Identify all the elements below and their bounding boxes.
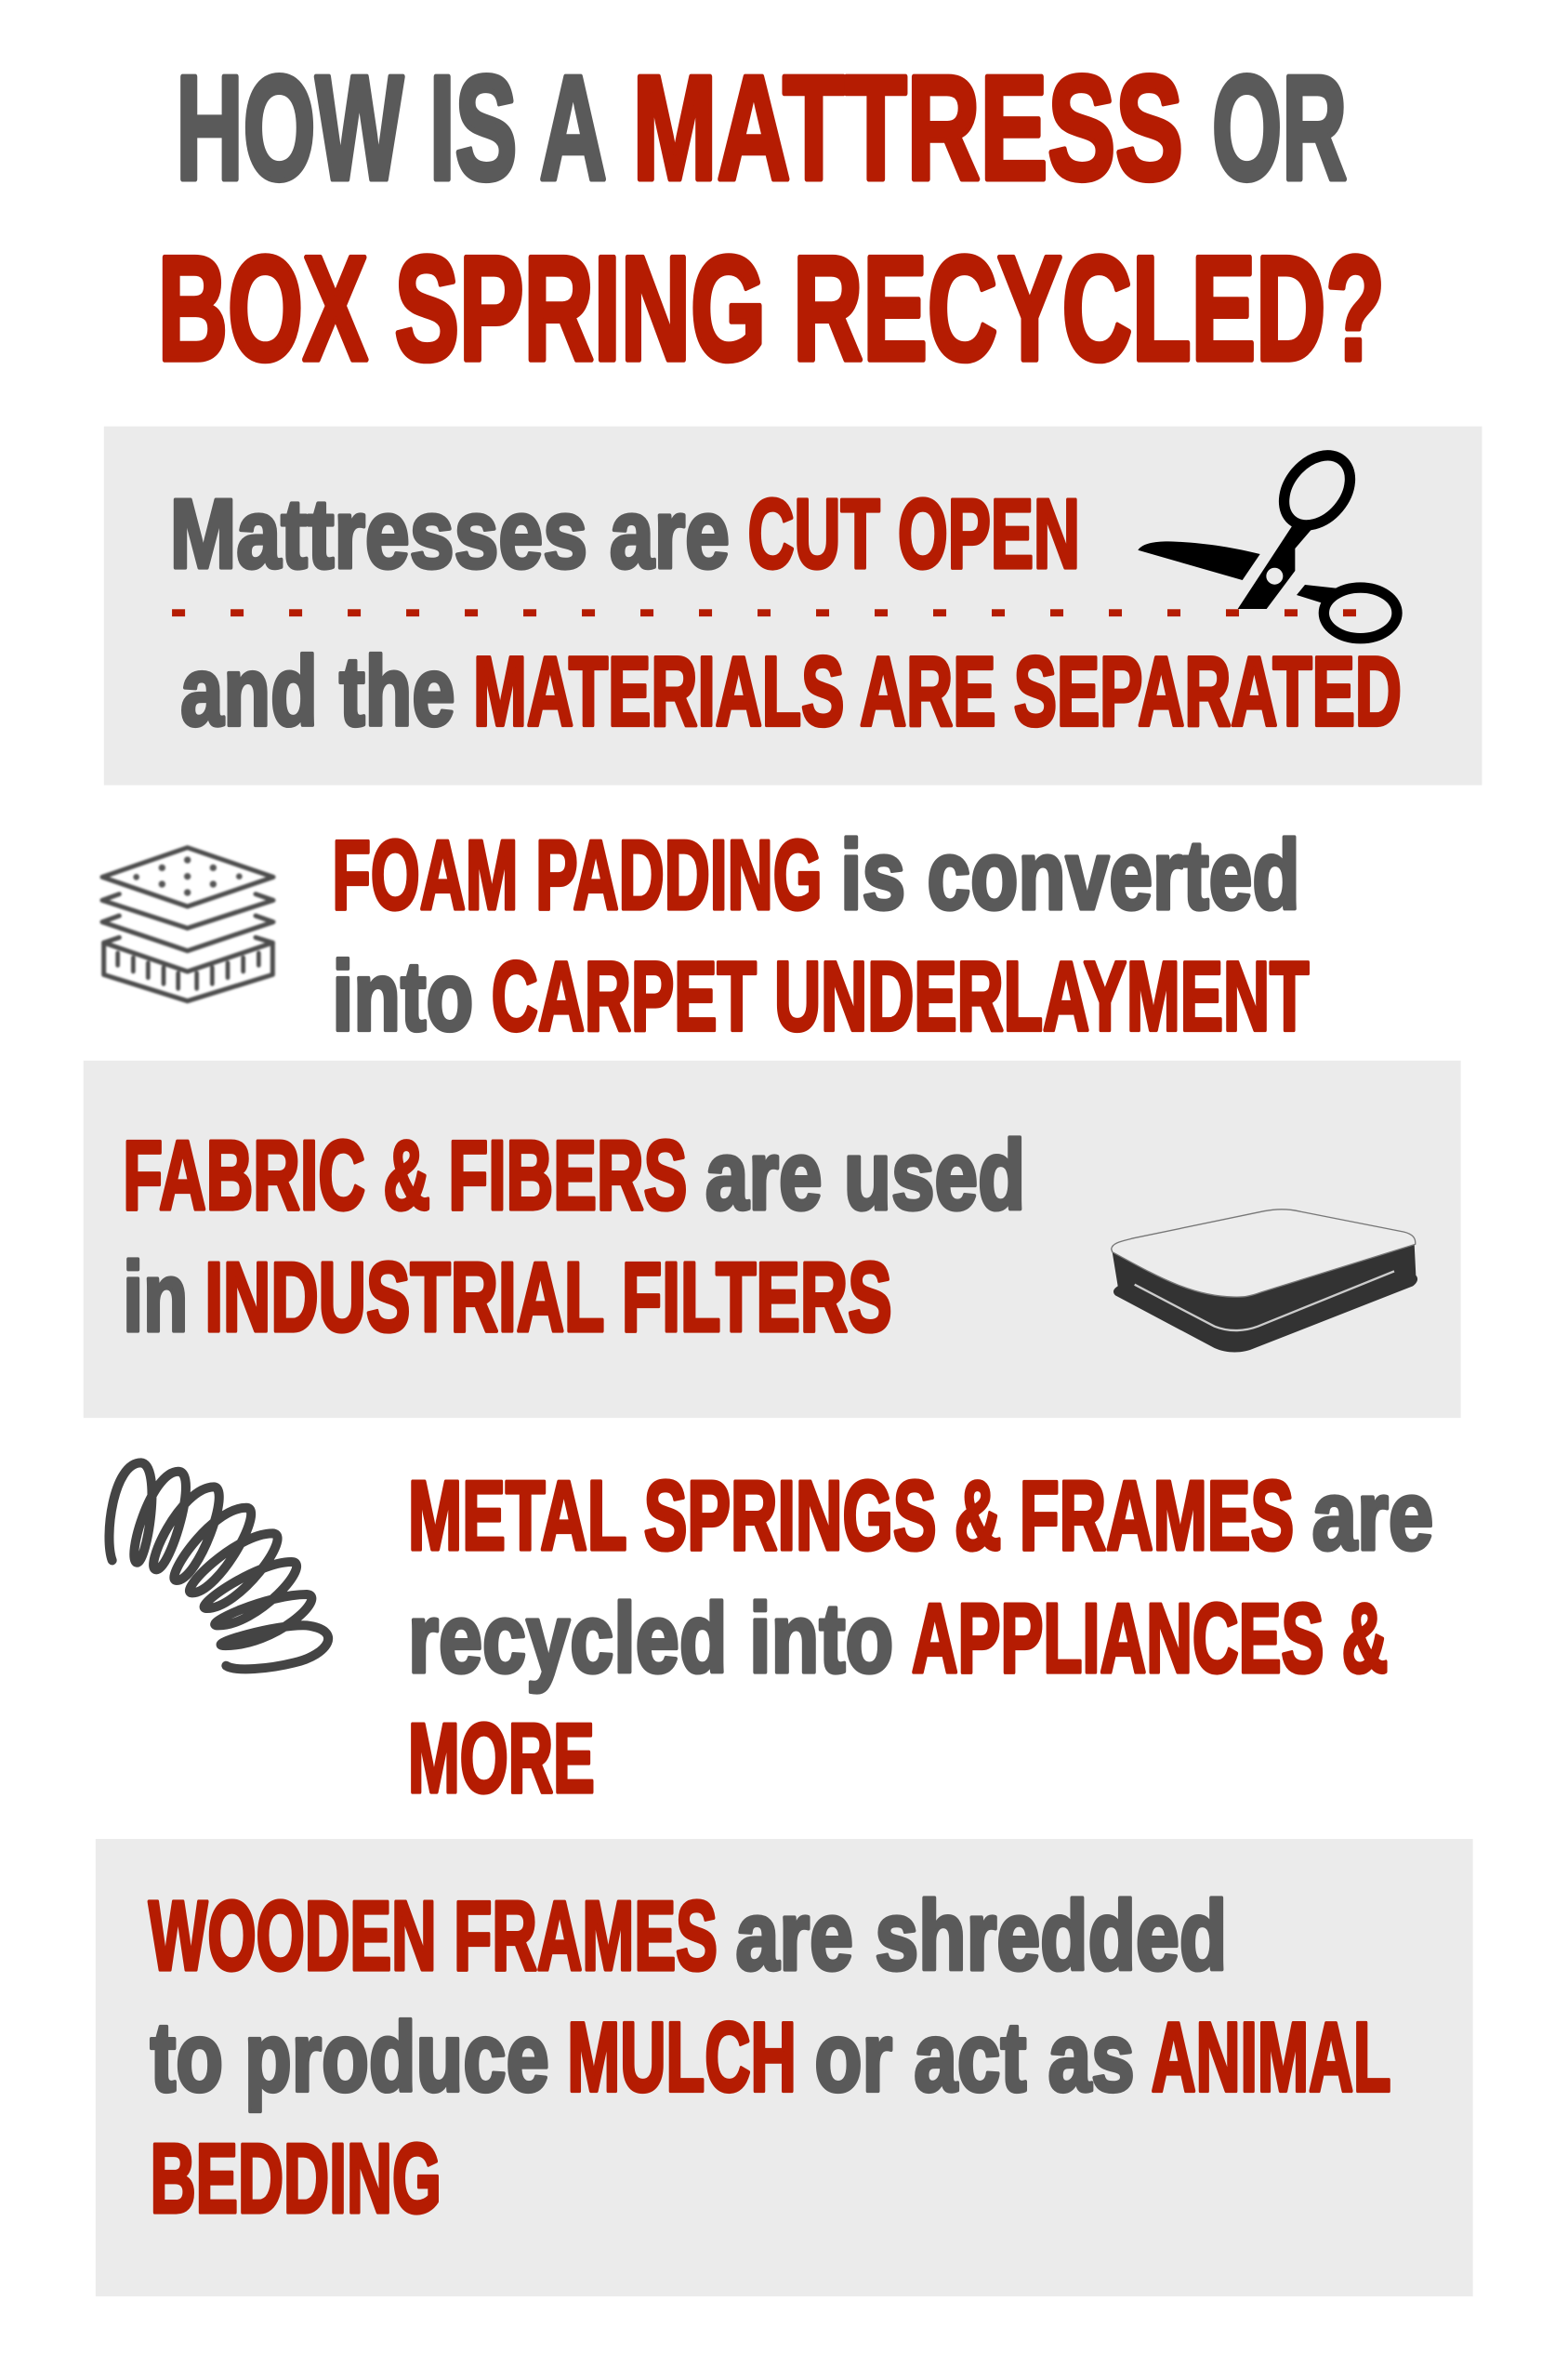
text: foam padding: FOAM PADDING bbox=[332, 821, 823, 931]
text: materials are separated: and the bbox=[180, 637, 455, 747]
text: metal springs and frames bbox=[408, 1461, 1433, 1813]
text: materials are separated bbox=[180, 637, 1402, 747]
title: OR bbox=[1212, 45, 1347, 211]
text: wooden frames: or act as bbox=[814, 2003, 1135, 2112]
text: mattresses are cut open: Mattresses are bbox=[170, 479, 730, 588]
title: MATTRESS bbox=[633, 45, 1183, 211]
text: metal springs and frames: are bbox=[1312, 1461, 1433, 1570]
icon: foam layers bbox=[102, 848, 273, 1001]
text: fabric and fibers: in bbox=[123, 1242, 188, 1352]
panel: cut open bbox=[104, 427, 1482, 786]
dashed cut line bbox=[172, 609, 1356, 616]
text: metal springs and frames: MORE bbox=[408, 1703, 595, 1813]
text: fabric and fibers: are used bbox=[705, 1121, 1025, 1231]
text: wooden frames: BEDDING bbox=[151, 2123, 441, 2233]
title: HOW IS A bbox=[176, 45, 607, 211]
text: fabric and fibers bbox=[123, 1121, 1025, 1352]
text: wooden frames: ANIMAL bbox=[1152, 2003, 1391, 2112]
text: foam padding: is converted bbox=[840, 821, 1300, 931]
text: wooden frames: WOODEN FRAMES bbox=[149, 1881, 718, 1990]
text: metal springs and frames: recycled into bbox=[408, 1583, 893, 1693]
text: wooden frames: to produce bbox=[151, 2003, 549, 2112]
text: foam padding: into bbox=[332, 942, 473, 1051]
text: foam padding bbox=[332, 821, 1309, 1051]
icon: mattress bbox=[1112, 1210, 1417, 1353]
panel: wooden frames bbox=[96, 1839, 1473, 2296]
section: foam padding bbox=[102, 821, 1309, 1051]
text: fabric and fibers: FABRIC & FIBERS bbox=[123, 1121, 687, 1231]
text: wooden frames: are shredded bbox=[736, 1881, 1227, 1990]
section: metal springs bbox=[109, 1461, 1433, 1813]
icon: spring bbox=[109, 1462, 328, 1669]
text: fabric and fibers: INDUSTRIAL FILTERS bbox=[204, 1242, 892, 1352]
text: wooden frames bbox=[149, 1881, 1391, 2233]
title bbox=[158, 45, 1385, 391]
text: wooden frames: MULCH bbox=[567, 2003, 797, 2112]
icon: scissors bbox=[1138, 443, 1397, 639]
text: mattresses are cut open: CUT OPEN bbox=[748, 479, 1080, 588]
panel: fabric and fibers bbox=[84, 1061, 1461, 1418]
